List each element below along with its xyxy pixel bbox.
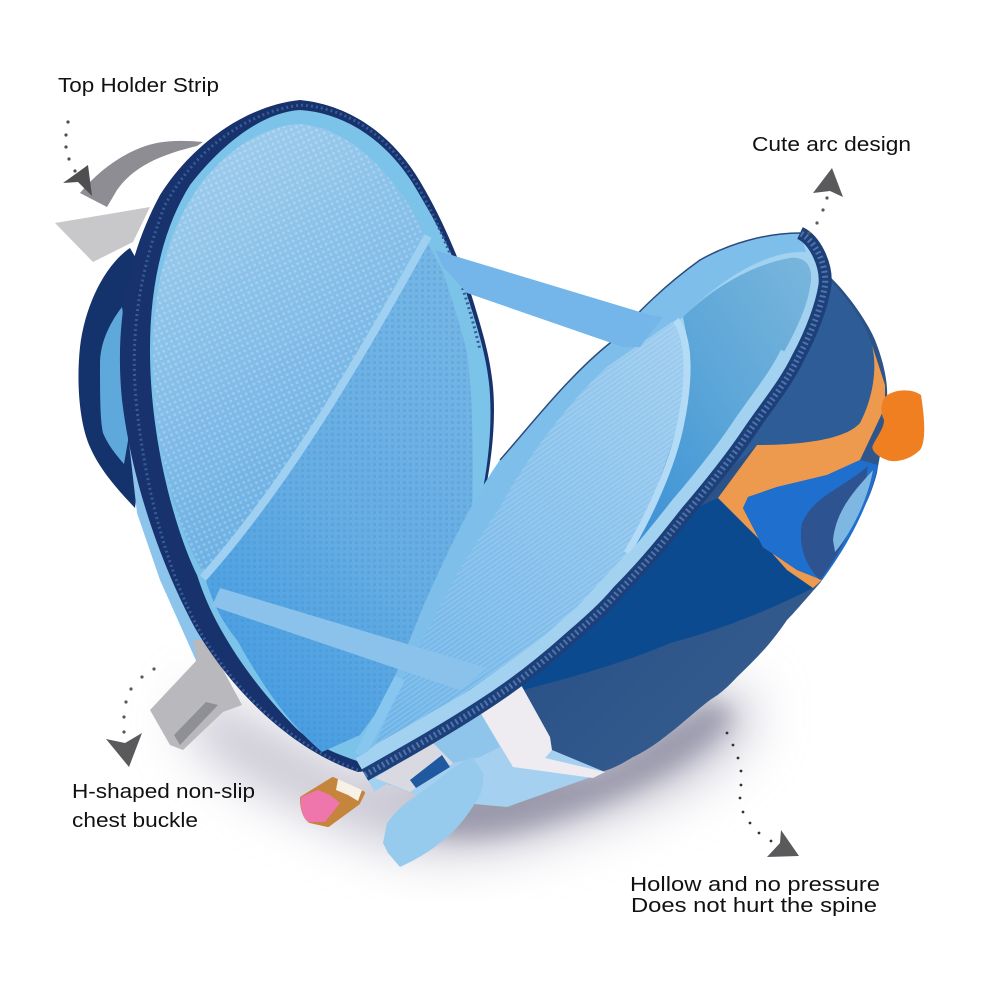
label: hollow back <box>630 873 880 917</box>
dark blue block <box>410 755 450 788</box>
right mesh pocket <box>375 322 690 745</box>
orange side fin <box>872 390 924 461</box>
light blue tail fin <box>383 757 483 867</box>
outer shell of right half <box>365 275 887 785</box>
arrow: hollow back <box>726 732 799 857</box>
floor shadow <box>185 690 753 852</box>
left half main panel <box>120 100 494 772</box>
shell dark saturated area <box>505 498 813 695</box>
zipper pull charm <box>301 779 363 825</box>
arrow: cute arc design <box>807 168 843 235</box>
label: hollow back: Does not hurt the spine <box>631 894 877 917</box>
grey patch <box>375 742 453 792</box>
right half interior <box>360 233 826 777</box>
right rim lining <box>360 233 806 757</box>
label: chest buckle: chest buckle <box>72 809 198 832</box>
left mesh pocket <box>205 240 473 752</box>
right pocket edge strip <box>627 320 687 553</box>
label: hollow back: Hollow and no pressure <box>630 873 880 896</box>
bottom strap <box>150 640 242 750</box>
arrow: chest buckle <box>106 667 156 767</box>
left rim lining <box>150 110 491 762</box>
bottom elastic band <box>212 588 487 690</box>
top holder strap <box>55 141 203 262</box>
right zipper <box>365 233 825 775</box>
arrow: top holder strip <box>63 120 92 196</box>
label: chest buckle <box>72 780 255 832</box>
right interior lining <box>627 258 811 553</box>
left back mesh <box>153 124 424 575</box>
tail base <box>368 683 605 807</box>
orange goggle band <box>718 345 885 588</box>
diagonal pocket edge strip <box>203 236 428 578</box>
shell upper section <box>735 278 876 465</box>
label: cute arc design: Cute arc design <box>752 133 911 156</box>
light blue stripe <box>432 712 500 763</box>
left zipper teeth <box>134 105 480 770</box>
top elastic band <box>435 250 663 347</box>
label: chest buckle: H-shaped non-slip <box>72 780 255 803</box>
white stripe <box>480 683 605 778</box>
left strip at hinge <box>360 678 400 755</box>
back padding of the backpack <box>78 248 215 665</box>
right zipper tape <box>365 358 798 775</box>
goggle lens <box>743 460 878 580</box>
label: top holder strip: Top Holder Strip <box>58 74 219 97</box>
white and light blue tail markings <box>368 683 605 807</box>
